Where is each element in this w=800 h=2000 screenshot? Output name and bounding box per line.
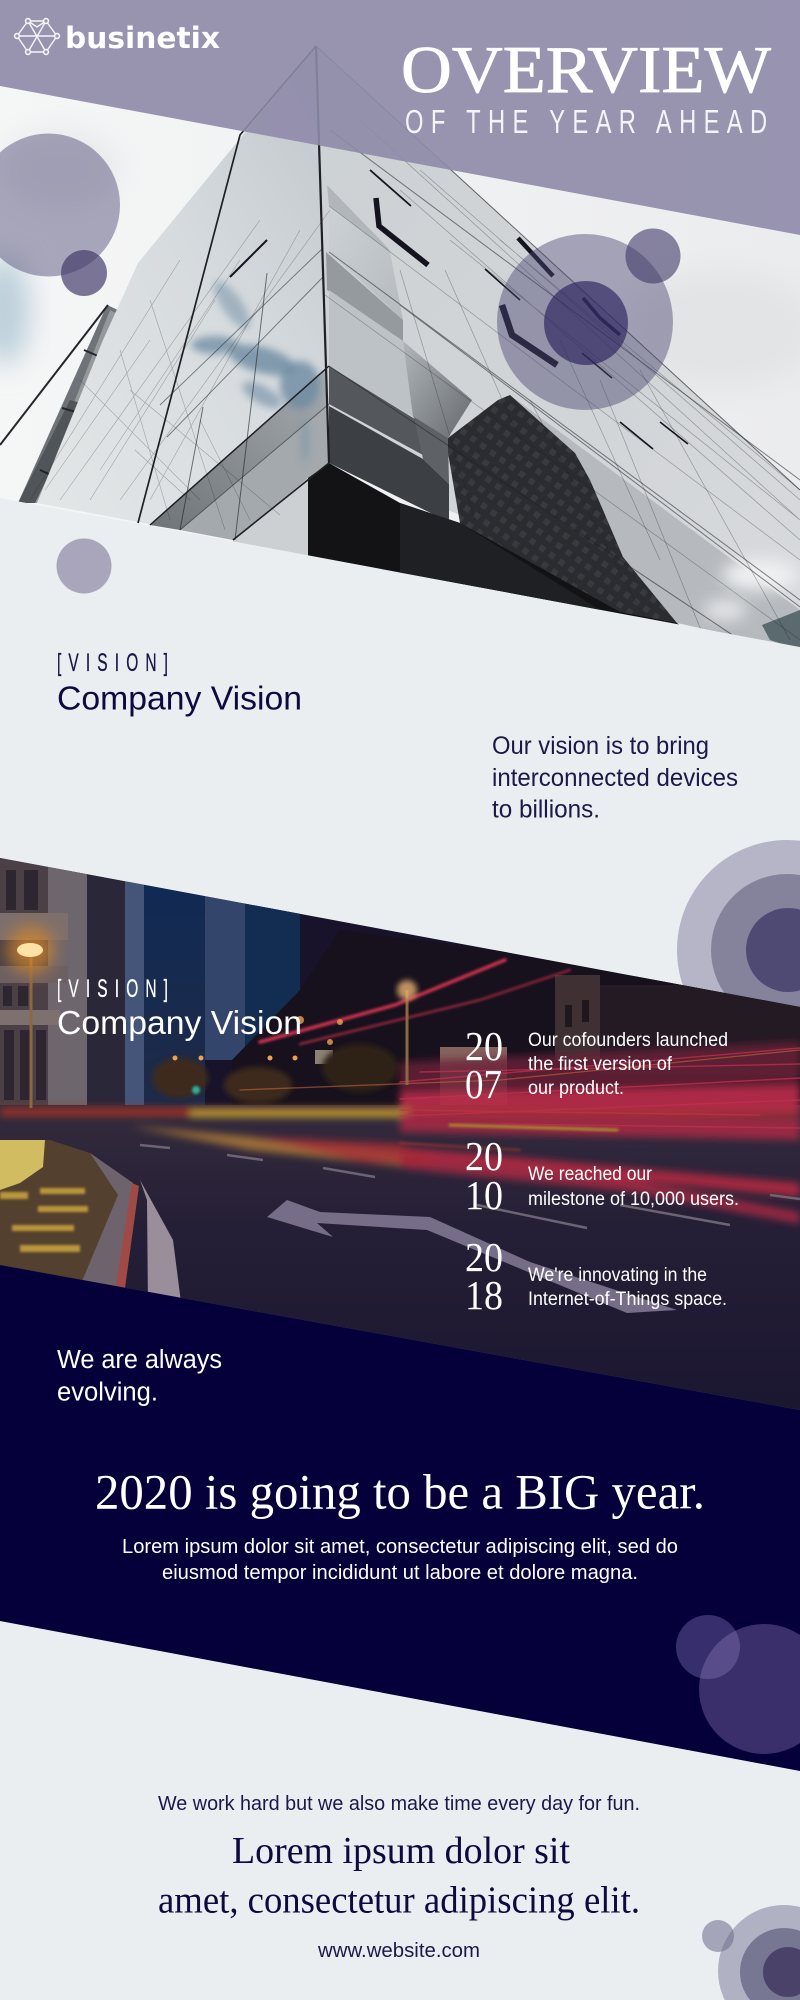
closing statement — [158, 1830, 640, 1922]
vision statement — [492, 732, 738, 824]
navy body text: eiusmod tempor incididunt ut labore et dolore magna. — [162, 1562, 638, 1584]
concentric circles: upper right — [677, 840, 800, 1060]
section heading on photo: Company Vision — [57, 1004, 302, 1041]
road — [0, 1105, 800, 1425]
timeline: 2018: Internet-of-Things space. — [528, 1289, 727, 1310]
timeline: 2007 — [465, 1023, 728, 1107]
right-face glass panels — [327, 185, 390, 252]
lane dashes — [140, 1145, 800, 1228]
timeline: 2007: 07 — [465, 1061, 502, 1107]
city buildings — [0, 850, 87, 1110]
vision statement: Our vision is to bring — [492, 732, 709, 760]
section heading: company vision: [VISION] — [57, 649, 168, 677]
website: www.website.com — [317, 1940, 480, 1962]
section heading on photo: [VISION] — [57, 975, 168, 1003]
timeline: 2007: 20 — [465, 1023, 503, 1069]
circles: right cluster — [497, 228, 680, 410]
tagline: We are always — [57, 1346, 222, 1374]
vision statement: to billions. — [492, 796, 600, 824]
subtitle: OF THE YEAR AHEAD — [405, 104, 767, 141]
sidewalk — [0, 1140, 133, 1280]
timeline: 2018 — [465, 1234, 727, 1318]
closing statement: amet, consectetur adipiscing elit. — [158, 1880, 640, 1922]
dark underside — [308, 463, 679, 624]
building photograph — [0, 0, 800, 650]
overlapping circles on navy — [676, 1615, 800, 1754]
timeline: 2007: the first version of — [528, 1054, 673, 1075]
street night photograph — [0, 850, 800, 1425]
closing intro line: We work hard but we also make time every day for fun. — [158, 1792, 640, 1815]
timeline: 2010: 10 — [465, 1172, 503, 1218]
tagline: evolving. — [57, 1378, 158, 1406]
top lilac banner — [0, 0, 800, 235]
tagline — [57, 1346, 222, 1406]
title: OVERVIEW — [401, 33, 772, 107]
circle below photo — [56, 538, 112, 594]
windows — [230, 170, 688, 449]
cloud reflection — [191, 276, 320, 464]
timeline: 2018: We're innovating in the — [528, 1265, 707, 1286]
logo — [15, 19, 220, 55]
big year heading: 2020 is going to be a BIG year. — [95, 1464, 705, 1520]
timeline: 2010 — [465, 1133, 739, 1218]
section heading: company vision — [57, 649, 302, 716]
section heading: company vision: Company Vision — [57, 680, 302, 716]
closing statement: Lorem ipsum dolor sit — [232, 1830, 570, 1872]
lamps — [31, 950, 407, 1108]
timeline: 2007: Our cofounders launched — [528, 1030, 728, 1051]
timeline: 2018: 20 — [465, 1234, 503, 1280]
vision statement: interconnected devices — [492, 764, 738, 792]
light trails — [0, 1042, 800, 1224]
icon: network hexagon — [15, 19, 59, 54]
concentric circles: lower right — [702, 1905, 800, 2000]
timeline: 2010: We reached our — [528, 1164, 653, 1185]
circles: left cluster — [0, 134, 120, 296]
title — [401, 33, 772, 141]
timeline: 2007: our product. — [528, 1078, 624, 1099]
right side building — [555, 975, 600, 1060]
section heading on photo — [57, 975, 302, 1041]
navy band — [0, 1265, 800, 1771]
timeline: 2010: milestone of 10,000 users. — [528, 1189, 739, 1210]
trees — [152, 1058, 208, 1098]
road arrow — [267, 1200, 677, 1313]
navy body text — [122, 1536, 678, 1584]
navy body text: Lorem ipsum dolor sit amet, consectetur adipiscing elit, sed do — [122, 1536, 678, 1558]
timeline: 2018: 18 — [465, 1272, 503, 1318]
building frame lines — [30, 46, 800, 640]
reflected tower — [448, 395, 677, 623]
logo wordmark: businetix — [65, 21, 220, 55]
timeline: 2010: 20 — [465, 1133, 503, 1179]
